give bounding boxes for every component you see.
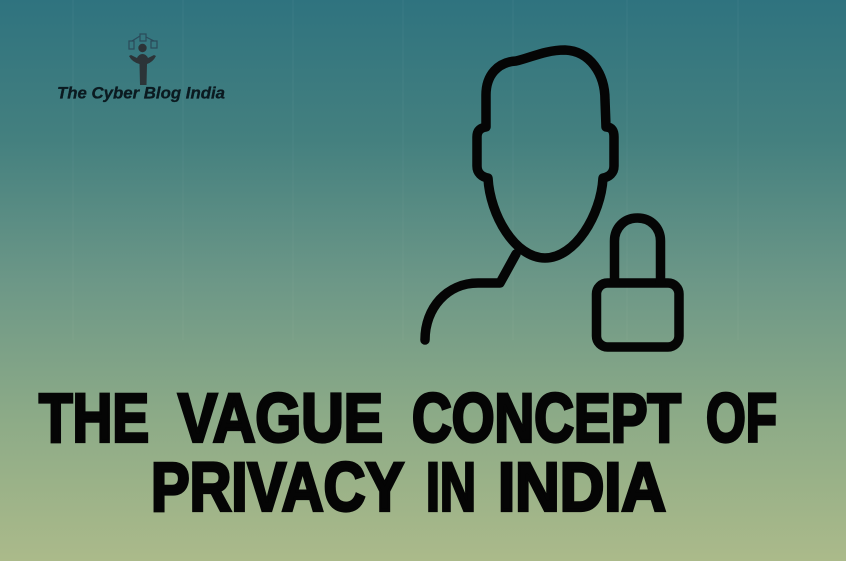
icon: person with connected devices [129,34,157,85]
title: VAGUE [178,380,383,456]
title: PRIVACY [151,448,404,526]
head [477,50,614,258]
title [39,380,777,526]
logo text: The Cyber Blog India [57,84,225,102]
logo: The Cyber Blog India [57,34,225,102]
icon: padlock [596,218,679,347]
title: THE [39,380,149,456]
lock body [596,283,679,347]
lock shackle [614,218,660,283]
title: IN [426,448,476,526]
icon: person outline [425,50,614,340]
title: INDIA [498,448,666,526]
title: OF [706,380,777,456]
title: CONCEPT [412,380,681,456]
shoulder [425,254,516,340]
